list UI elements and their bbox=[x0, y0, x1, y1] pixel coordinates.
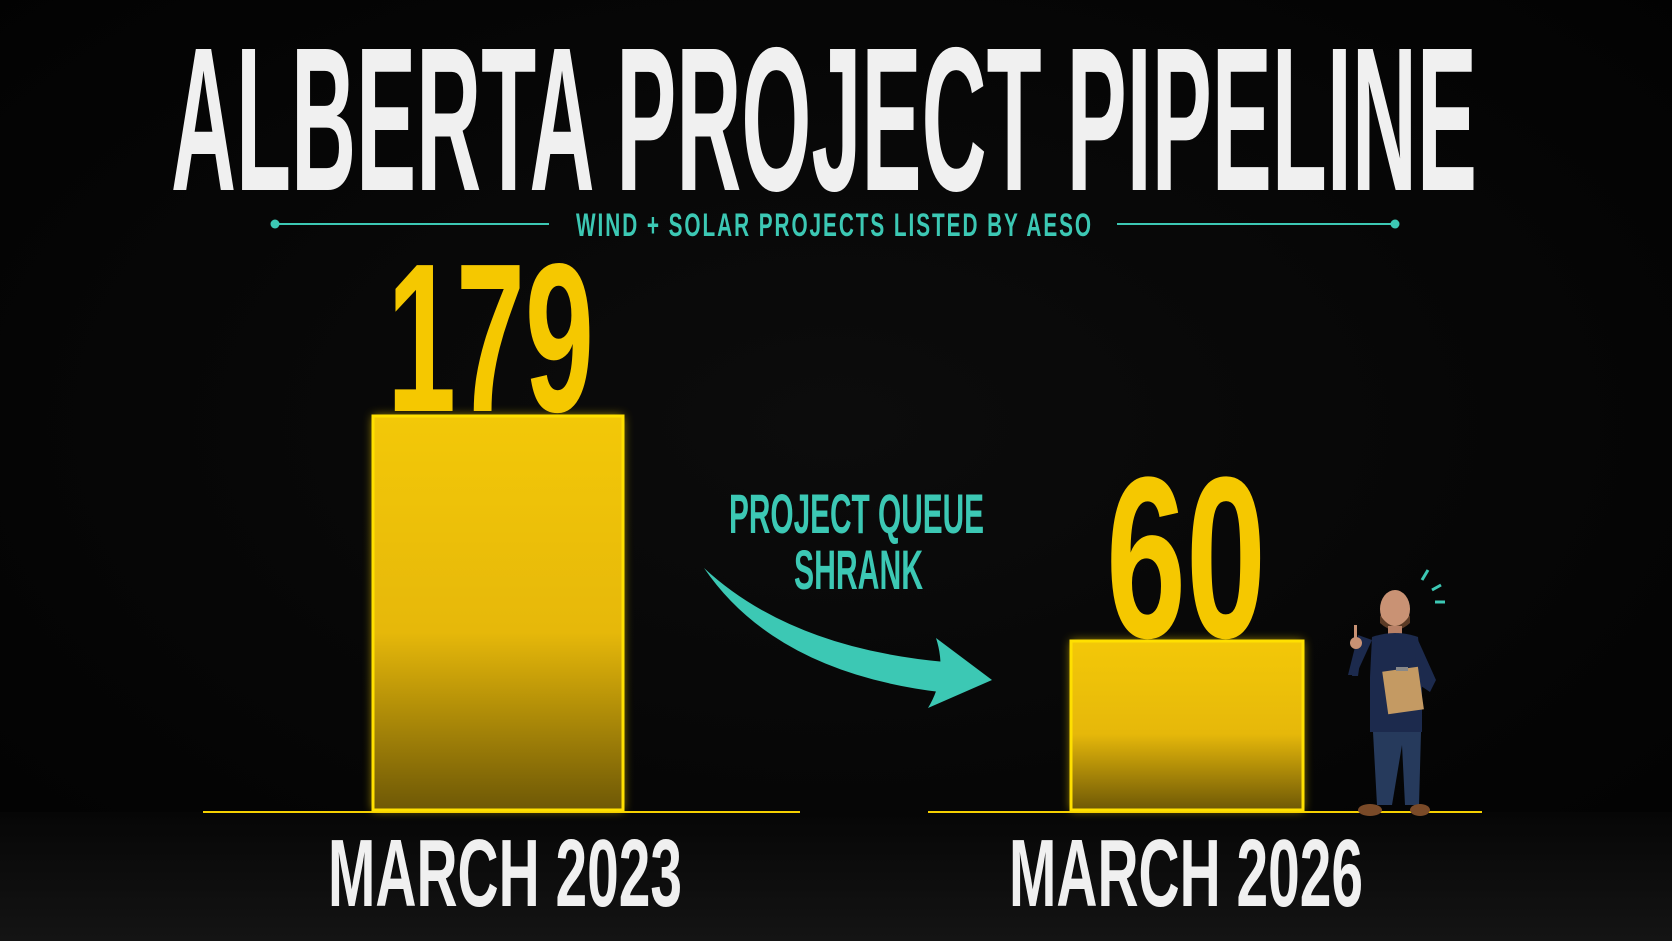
baseline glow bbox=[203, 810, 1482, 814]
arrow bbox=[704, 568, 992, 708]
label March 2023: MARCH 2023 bbox=[328, 820, 682, 927]
bar: March 2023 bbox=[373, 416, 623, 810]
callout text bbox=[729, 482, 984, 601]
label March 2026: MARCH 2026 bbox=[1009, 820, 1363, 927]
subtitle: WIND + SOLAR PROJECTS LISTED BY AESO bbox=[576, 207, 1093, 243]
person bbox=[1348, 570, 1445, 816]
callout text: SHRANK bbox=[794, 538, 923, 601]
value 179: 179 bbox=[387, 219, 594, 456]
bar: March 2026 bbox=[1071, 641, 1303, 810]
callout text: PROJECT QUEUE bbox=[729, 482, 984, 545]
value 60: 60 bbox=[1106, 429, 1266, 686]
